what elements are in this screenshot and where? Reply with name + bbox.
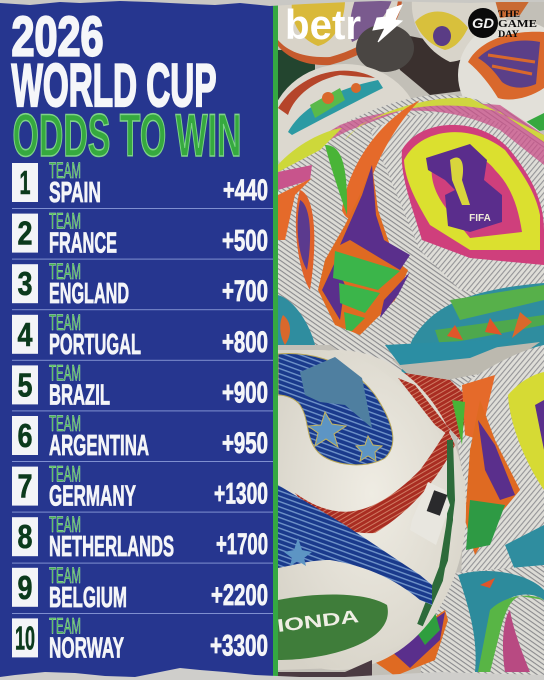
- row 8: Netherlands: 8: [18, 518, 32, 555]
- honda sponsor patch: [276, 595, 388, 660]
- row 1: Spain: TEAM: [49, 158, 81, 183]
- pink and yellow logo panel: [402, 125, 544, 265]
- row 5: Brazil: 5: [18, 366, 32, 403]
- logo: The Game Day: THE: [498, 9, 520, 19]
- torn paper edge: bottom: [0, 668, 544, 680]
- row 4: Portugal: 4: [18, 316, 33, 353]
- photo: pile of match balls: [210, 0, 544, 680]
- row 2: France: FRANCE: [49, 228, 117, 260]
- swoosh orange and green: [342, 100, 420, 219]
- title: [12, 4, 242, 169]
- honda sponsor patch: IONDA: [276, 606, 360, 636]
- row 9: Belgium: TEAM: [49, 563, 81, 588]
- row 6: Argentina: 6: [18, 417, 32, 454]
- logo: The Game Day: GAME: [498, 19, 537, 30]
- left middle ball: [270, 64, 420, 196]
- row 8: Netherlands: +1700: [216, 528, 268, 561]
- row 3: England: +700: [222, 275, 268, 308]
- teal band at bottom of main ball: [400, 283, 544, 375]
- row 10: Norway: TEAM: [49, 613, 81, 638]
- dark ball: [356, 24, 414, 72]
- purple and orange ball scrap: [372, 610, 448, 676]
- row 3: England: ENGLAND: [49, 278, 129, 310]
- row 7: Germany: TEAM: [49, 462, 81, 487]
- row 2: France: [12, 209, 268, 260]
- row 2: France: 2: [18, 215, 32, 252]
- right lower ball: [398, 345, 544, 600]
- row 7: Germany: +1300: [214, 478, 268, 511]
- red stripe: [295, 430, 455, 533]
- torn paper edge: top: [0, 0, 544, 6]
- blue lower band: [278, 485, 432, 605]
- row 3: England: 3: [18, 265, 32, 302]
- row 1: Spain: 1: [20, 164, 30, 201]
- row 9: Belgium: [12, 563, 268, 614]
- row 5: Brazil: BRAZIL: [49, 379, 110, 411]
- row 9: Belgium: +2200: [211, 579, 268, 612]
- row 4: Portugal: TEAM: [49, 310, 81, 335]
- row 10: Norway: NORWAY: [49, 632, 124, 664]
- row 8: Netherlands: TEAM: [49, 512, 81, 537]
- lower right ball: [420, 565, 544, 680]
- row 10: Norway: +3300: [210, 629, 268, 662]
- row 9: Belgium: 9: [18, 569, 32, 606]
- logo: The Game Day: DAY: [498, 29, 520, 39]
- row 5: Brazil: +900: [222, 376, 268, 409]
- main ball: [278, 95, 544, 390]
- row 6: Argentina: ARGENTINA: [49, 430, 149, 462]
- blue star panel: [278, 354, 393, 465]
- orange panel with green stripes: [318, 165, 410, 335]
- row 10: Norway: [12, 613, 268, 664]
- logo: betr: betr: [285, 1, 361, 48]
- row 2: France: +500: [222, 225, 268, 258]
- row 3: England: [12, 259, 268, 310]
- row 2: France: TEAM: [49, 209, 81, 234]
- row 7: Germany: 7: [18, 468, 32, 505]
- upper right ball: [458, 20, 544, 133]
- row 6: Argentina: +950: [222, 427, 268, 460]
- row 8: Netherlands: [12, 512, 268, 563]
- icon: lightning bolt: [373, 5, 402, 42]
- row 9: Belgium: BELGIUM: [49, 582, 127, 614]
- row 1: Spain: [12, 158, 268, 209]
- left small patch: [278, 128, 342, 172]
- row 8: Netherlands: NETHERLANDS: [49, 531, 174, 563]
- small ball bottom of left edge: [278, 295, 315, 345]
- row 1: Spain: +440: [223, 174, 268, 207]
- logo: The Game Day: [468, 8, 537, 39]
- row 5: Brazil: TEAM: [49, 360, 81, 385]
- row 7: Germany: GERMANY: [49, 481, 136, 513]
- title line: WORLD CUP: WORLD CUP: [12, 52, 216, 119]
- title line: ODDS TO WIN: ODDS TO WIN: [12, 102, 242, 169]
- lower band: [392, 342, 540, 385]
- dark gaps between balls: [380, 30, 480, 95]
- title line: 2026: 2026: [12, 4, 104, 68]
- FIFA 26 emblem: FIFA: [469, 213, 491, 224]
- row 6: Argentina: TEAM: [49, 411, 81, 436]
- row 4: Portugal: [12, 310, 268, 361]
- blue panel: [0, 0, 273, 680]
- upper left ball: [278, 0, 402, 65]
- upper middle ball: [412, 0, 530, 62]
- row 7: Germany: [12, 462, 268, 513]
- logo: betr: [285, 1, 402, 48]
- qr tag: [410, 482, 450, 545]
- row 6: Argentina: [12, 411, 268, 462]
- logo: The Game Day: GD: [472, 15, 494, 31]
- green divider bar: [273, 0, 278, 680]
- row 10: Norway: 10: [15, 619, 35, 656]
- row 4: Portugal: +800: [222, 326, 268, 359]
- FIFA 26 emblem: [426, 144, 502, 232]
- green stripe: [420, 440, 452, 625]
- front ball with blue star swirl: [210, 350, 466, 670]
- row 1: Spain: SPAIN: [49, 177, 101, 209]
- row 3: England: TEAM: [49, 259, 81, 284]
- cut bottom dark: [278, 660, 372, 680]
- row 4: Portugal: PORTUGAL: [49, 329, 141, 361]
- row 5: Brazil: [12, 360, 268, 411]
